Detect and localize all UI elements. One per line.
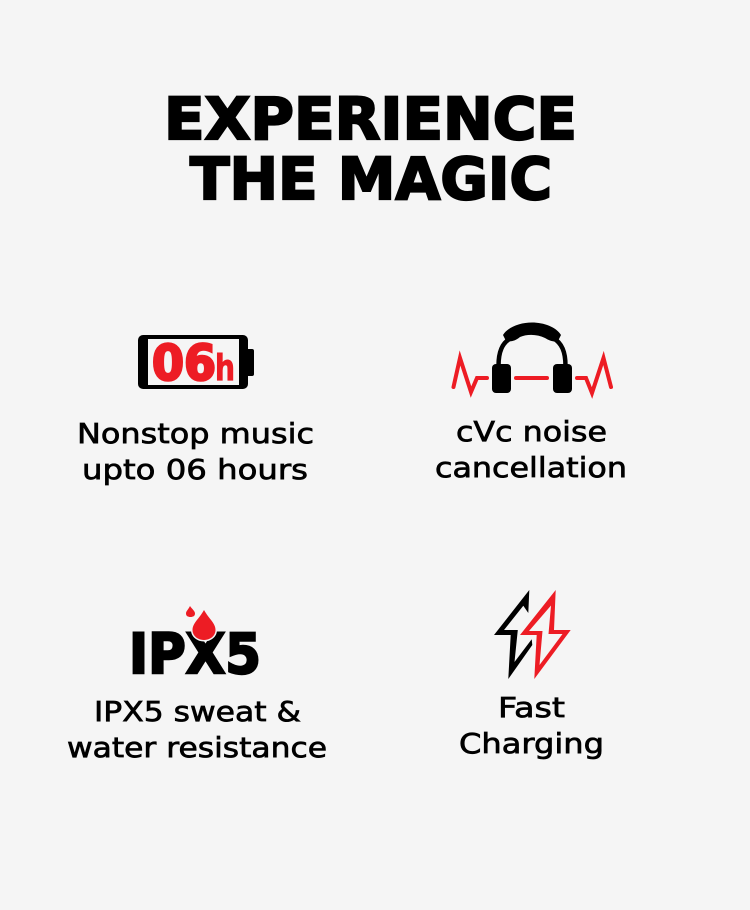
title xyxy=(164,85,577,213)
icon: battery 06h xyxy=(138,335,254,392)
text: battery caption: upto 06 hours xyxy=(82,453,308,486)
icon: battery 06h: 06 xyxy=(152,335,216,392)
text: fast charging caption: Charging xyxy=(459,727,604,760)
text: fast charging caption: Fast xyxy=(498,691,565,724)
text: IPX5 caption xyxy=(67,695,327,764)
text: noise cancellation caption: cancellation xyxy=(435,451,627,484)
text: battery caption xyxy=(77,417,314,486)
title: THE MAGIC xyxy=(190,145,552,213)
text: battery caption: Nonstop music xyxy=(77,417,314,450)
icon: IPX5 with water drops: IPX5 xyxy=(129,622,261,686)
text: fast charging caption xyxy=(459,691,604,760)
icon: battery 06h: h xyxy=(215,348,235,389)
icon: headphones with noise waves xyxy=(454,322,611,393)
text: noise cancellation caption: cVc noise xyxy=(456,415,607,448)
icon: double lightning bolts xyxy=(494,590,571,679)
text: IPX5 caption: IPX5 sweat & xyxy=(94,695,301,728)
title: EXPERIENCE xyxy=(164,85,577,153)
text: noise cancellation caption xyxy=(435,415,627,484)
text: IPX5 caption: water resistance xyxy=(67,731,327,764)
